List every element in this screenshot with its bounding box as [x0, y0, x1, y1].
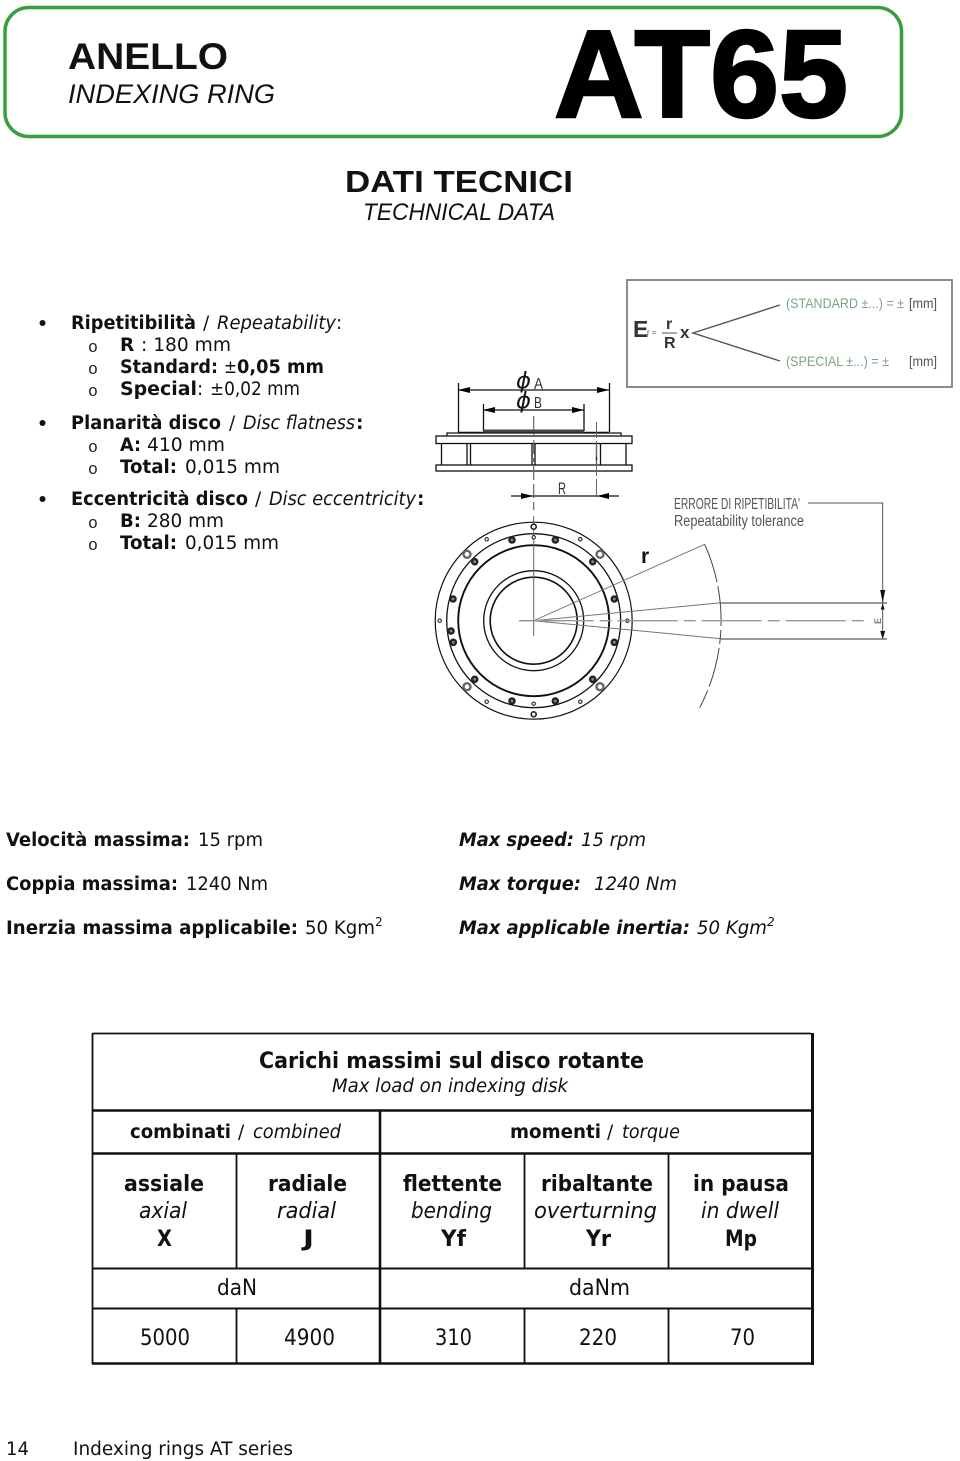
eccentricity group: Eccentricità disco: [71, 489, 248, 510]
repeatability group: Standard:: [120, 357, 218, 378]
column headers: X: [157, 1227, 172, 1252]
formula box: (STANDARD ±...) = ±: [786, 295, 904, 311]
repeatability group: ±0,02 mm: [210, 379, 300, 400]
values: [140, 1326, 755, 1351]
table grid: [92, 1033, 814, 1365]
units: daN: [217, 1276, 257, 1301]
values: 4900: [284, 1326, 335, 1351]
column headers: in dwell: [701, 1199, 779, 1224]
column headers: J: [300, 1227, 314, 1252]
side view drawing: B: [534, 395, 542, 412]
flatness group: o: [88, 438, 98, 457]
repeatability group: Repeatability: [217, 313, 337, 334]
repeatability group: 0,05 mm: [237, 357, 324, 378]
group header: combined: [130, 1122, 341, 1143]
values: 310: [435, 1326, 472, 1351]
section heading: TECHNICAL DATA: [363, 199, 555, 226]
performance data Italian: 1240 Nm: [186, 874, 268, 895]
repeatability group: /: [203, 313, 210, 334]
group header: torque: [510, 1122, 680, 1143]
column headers: bending: [411, 1199, 492, 1224]
performance data English: [459, 830, 775, 939]
performance data English: 1240 Nm: [594, 874, 677, 895]
group header: torque: torque: [622, 1122, 680, 1143]
column headers: axial: [139, 1199, 187, 1224]
repeatability group: o: [88, 382, 98, 401]
performance data English: Max applicable inertia:: [459, 918, 690, 939]
flatness group: o: [88, 460, 98, 479]
group header: combined: combined: [253, 1122, 341, 1143]
repeatability group: :: [336, 313, 342, 334]
repeatability group: Special: [120, 379, 197, 400]
label: repeatability tolerance: ERRORE DI RIPETIBILITA': [674, 496, 800, 513]
values: 220: [579, 1326, 617, 1351]
performance data Italian: 15 rpm: [198, 830, 263, 851]
column headers: radial: [277, 1199, 336, 1224]
performance data English: Max speed:: [459, 830, 574, 851]
formula box: R: [664, 335, 676, 352]
eccentricity group: B:: [120, 511, 141, 532]
repeatability group: : 180 mm: [141, 335, 231, 356]
side view drawing: ϕ: [516, 389, 531, 414]
flatness group: A:: [120, 435, 141, 456]
side view drawing: R: [558, 479, 566, 498]
column headers: assiale: [124, 1172, 204, 1197]
values: 70: [730, 1326, 755, 1351]
footer: Indexing rings AT series: [73, 1439, 293, 1460]
repeatability error construction: [534, 496, 887, 708]
eccentricity group: Total:: [120, 533, 177, 554]
repeatability error construction: Repeatability tolerance: [674, 513, 804, 530]
eccentricity group: 280 mm: [147, 511, 224, 532]
flatness group: 410 mm: [147, 435, 225, 456]
table: max load on indexing disk: Max load on indexing disk: [332, 1076, 569, 1097]
formula box: [627, 280, 952, 387]
column headers: Yf: [440, 1227, 466, 1252]
formula box: r =: [647, 328, 657, 337]
flatness group: Disc flatness: [243, 413, 355, 434]
group header: torque: momenti: [510, 1122, 601, 1143]
eccentricity group: o: [88, 536, 98, 555]
repeatability group: o: [88, 360, 98, 379]
column headers: Yr: [585, 1227, 611, 1252]
formula box: r: [666, 316, 672, 333]
column headers: radiale: [268, 1172, 347, 1197]
eccentricity group: o: [88, 514, 98, 533]
formula box: x: [680, 323, 690, 342]
performance data Italian: Coppia massima:: [6, 874, 178, 895]
performance data English: Max torque:: [459, 874, 581, 895]
flatness group: :: [356, 413, 363, 434]
eccentricity group: Disc eccentricity: [269, 489, 417, 510]
performance data Italian: 2: [375, 915, 383, 929]
label: r: r: [641, 545, 649, 568]
title: ANELLO: ANELLO: [68, 36, 228, 77]
repeatability group: R: [120, 335, 134, 356]
performance data English: 50 Kgm: [697, 918, 767, 939]
group header: torque: /: [607, 1122, 614, 1143]
flatness group: 0,015 mm: [185, 457, 280, 478]
performance data English: 15 rpm: [581, 830, 646, 851]
flatness group: /: [229, 413, 236, 434]
formula box: [mm]: [909, 353, 937, 369]
flatness group: Planarità disco: [71, 413, 221, 434]
subtitle: indexing ring: INDEXING RING: [68, 79, 275, 109]
values: 5000: [140, 1326, 190, 1351]
header panel: [5, 6, 902, 144]
repeatability group: ±: [224, 357, 237, 378]
group header: combined: combinati: [130, 1122, 231, 1143]
eccentricity group: /: [255, 489, 262, 510]
performance data Italian: [6, 830, 383, 939]
side view drawing: [436, 369, 632, 510]
repeatability group: Ripetitibilità: [71, 313, 196, 334]
side view drawing: ϕ: [516, 369, 531, 394]
units: [217, 1276, 630, 1301]
column headers: Mp: [725, 1227, 757, 1252]
performance data Italian: 50 Kgm: [305, 918, 375, 939]
group header: combined: /: [238, 1122, 245, 1143]
eccentricity group: 0,015 mm: [185, 533, 279, 554]
performance data Italian: Velocità massima:: [6, 830, 190, 851]
repeatability group: :: [197, 379, 203, 400]
column headers: in pausa: [693, 1172, 789, 1197]
ring front view drawing: [435, 516, 632, 719]
column headers: overturning: [534, 1199, 657, 1224]
section heading: DATI TECNICI: [345, 164, 573, 199]
column headers: ribaltante: [541, 1172, 653, 1197]
performance data Italian: Inerzia massima applicabile:: [6, 918, 298, 939]
model name AT65: AT65: [554, 6, 848, 144]
repeatability error construction: E: [873, 618, 883, 624]
formula box: (SPECIAL ±...) = ±: [786, 353, 889, 369]
flatness group: [40, 413, 363, 479]
formula box: [mm]: [909, 295, 937, 311]
repeatability group: [40, 313, 342, 401]
column headers: [124, 1172, 789, 1252]
performance data English: 2: [767, 915, 775, 929]
eccentricity group: [40, 489, 424, 555]
flatness group: Total:: [120, 457, 177, 478]
eccentricity group: :: [417, 489, 424, 510]
formula box: E: [633, 316, 648, 342]
table: max load on indexing disk: [92, 1033, 814, 1365]
units: daNm: [569, 1276, 630, 1301]
footer: 14: [6, 1439, 29, 1460]
section heading: [345, 164, 573, 226]
repeatability group: o: [88, 338, 98, 357]
column headers: flettente: [403, 1172, 502, 1197]
table title: Carichi massimi sul disco rotante: [259, 1049, 644, 1074]
side view drawing: A: [534, 376, 543, 393]
specification list: [40, 313, 424, 555]
